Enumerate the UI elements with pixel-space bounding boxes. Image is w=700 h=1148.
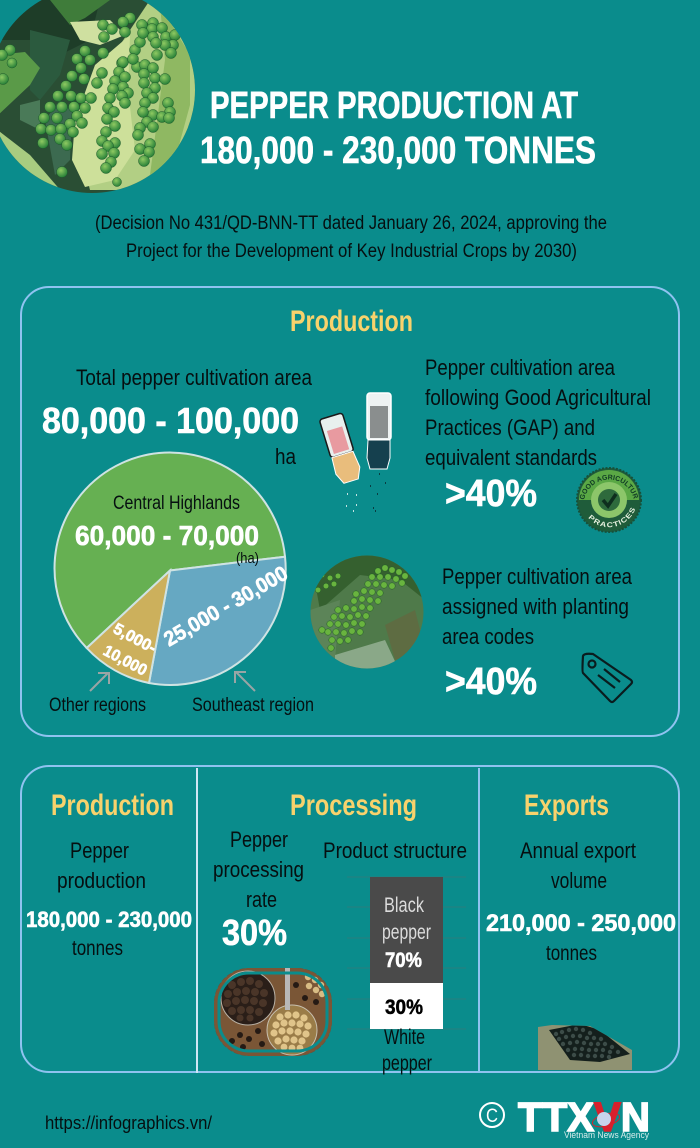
subtitle: decision reference	[95, 213, 607, 262]
heading: exports: Exports	[524, 789, 609, 822]
heading: production: Production	[51, 789, 174, 822]
value: black pepper: 70%	[385, 949, 422, 972]
value: other regions	[100, 621, 159, 680]
spike one	[98, 20, 108, 30]
label: white pepper: White	[384, 1026, 425, 1049]
unit: (ha): (ha)	[236, 550, 259, 567]
label: black pepper: Black	[384, 894, 424, 917]
pepper production label: production	[57, 868, 146, 893]
GAP area value: >40%	[445, 473, 537, 515]
logo: TTXVN: TTXVN	[518, 1094, 650, 1140]
pepper processing rate label: rate	[246, 887, 277, 912]
pepper processing rate value: 30%	[222, 912, 287, 953]
bar segment: white pepper	[370, 983, 443, 1029]
spike three	[130, 44, 140, 56]
icon: Good Agricultural Practices badge: GOOD AGRICULTURAL	[580, 474, 638, 500]
title: 180,000 - 230,000 TONNES	[200, 130, 596, 172]
bar segment: black pepper	[370, 877, 443, 983]
value: Central Highlands: 60,000 - 70,000	[75, 520, 259, 551]
icon: pepper shakers	[319, 393, 391, 511]
pie slice: other regions	[87, 570, 170, 683]
arrow: Southeast region	[235, 672, 255, 691]
title: PEPPER PRODUCTION AT	[210, 85, 578, 127]
label: black pepper: pepper	[382, 921, 431, 944]
pie chart: area by region	[55, 453, 292, 685]
photo: green pepper on the vine	[0, 0, 195, 193]
planting area codes text	[442, 564, 633, 649]
value: Southeast region: 25,000 - 30,000	[160, 562, 292, 651]
pepper processing rate label: Pepper	[230, 827, 288, 852]
GAP area text: equivalent standards	[425, 445, 597, 470]
total cultivation area label: Total pepper cultivation area	[76, 365, 313, 390]
spike two	[116, 58, 128, 68]
pepper processing rate label: processing	[213, 857, 304, 882]
annual export volume label: Annual export	[520, 838, 636, 863]
unit: ha: ha	[275, 444, 297, 469]
annual export volume label: volume	[551, 868, 607, 893]
photo: sack of black pepper	[538, 1024, 633, 1071]
unit: tonnes: tonnes	[72, 937, 123, 960]
label: white pepper: pepper	[382, 1052, 432, 1075]
source url: https://infographics.vn/	[45, 1113, 212, 1133]
GAP area text: Pepper cultivation area	[425, 355, 616, 380]
GAP area text: Practices (GAP) and	[425, 415, 595, 440]
panel heading: production: Production	[290, 305, 413, 338]
photo: black and white peppercorns	[214, 968, 332, 1056]
label: other regions: Other regions	[49, 695, 146, 716]
value: white pepper: 30%	[385, 996, 423, 1019]
subtitle: decision reference: Project for the Development of Key Industrial Crops by 2030)	[126, 241, 577, 262]
pepper production label	[57, 838, 146, 893]
heading: product structure: Product structure	[323, 838, 467, 863]
panel: production, processing, exports	[21, 766, 679, 1075]
photo: pepper cluster	[308, 553, 426, 672]
logo: TTXVN: Vietnam News Agency	[564, 1130, 649, 1140]
total cultivation area value: 80,000 - 100,000	[42, 400, 299, 441]
pepper production label: Pepper	[70, 838, 129, 863]
pepper processing rate label	[213, 827, 304, 912]
stacked bar chart: product structure	[347, 877, 466, 1075]
annual export volume value: 210,000 - 250,000	[486, 910, 676, 937]
heading: processing: Processing	[290, 789, 417, 822]
GAP area text	[425, 355, 651, 470]
value: other regions: 10,000	[100, 643, 150, 680]
icon: tag	[582, 654, 632, 702]
planting area codes text: area codes	[442, 624, 534, 649]
label: Southeast region: Southeast region	[192, 695, 314, 716]
unit: tonnes: tonnes	[546, 942, 597, 965]
planting area codes text: Pepper cultivation area	[442, 564, 633, 589]
pepper production value: 180,000 - 230,000	[26, 907, 192, 932]
label: white pepper	[382, 1026, 432, 1075]
planting area codes value: >40%	[445, 661, 537, 703]
pie slice: Central Highlands	[55, 453, 285, 648]
left cluster	[4, 44, 16, 56]
arrow: other regions	[90, 673, 109, 691]
label: black pepper	[382, 894, 431, 944]
icon: Good Agricultural Practices badge	[576, 467, 642, 533]
panel: production area	[20, 286, 680, 737]
title	[200, 85, 596, 172]
icon: Good Agricultural Practices badge: PRACTICES	[588, 508, 635, 528]
planting area codes text: assigned with planting	[442, 594, 629, 619]
annual export volume label	[520, 838, 636, 893]
pie slice: Southeast region	[149, 557, 286, 685]
logo: TTXVN: C	[486, 1106, 498, 1127]
subtitle: decision reference: (Decision No 431/QD-BNN-TT dated January 26, 2024, approving the	[95, 213, 607, 234]
GAP area text: following Good Agricultural	[425, 385, 651, 410]
label: Central Highlands: Central Highlands	[113, 493, 240, 514]
value: other regions: 5,000-	[110, 621, 159, 657]
